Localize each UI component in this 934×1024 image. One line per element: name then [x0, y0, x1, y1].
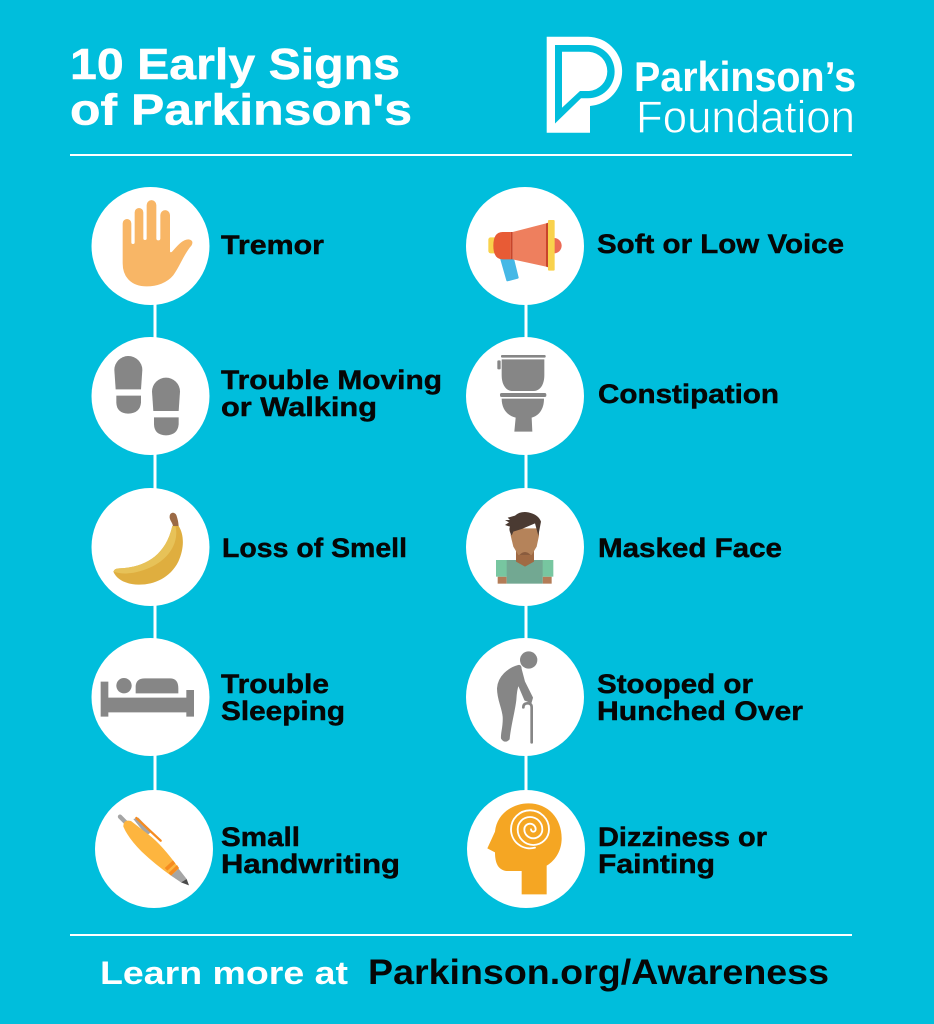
icon: megaphone — [488, 220, 562, 280]
icon: footprints — [114, 356, 180, 435]
footer call to action: Parkinson.org/Awareness — [368, 953, 829, 992]
panel: Trouble Sleeping — [92, 638, 345, 756]
label: Small Handwriting: Small — [221, 822, 300, 852]
panel: Dizziness or Fainting — [467, 790, 768, 908]
icon: stooped person with cane — [498, 651, 537, 742]
label: Stooped or Hunched Over: Hunched Over — [597, 696, 804, 726]
label: Stooped or Hunched Over — [597, 669, 804, 726]
icon: hand — [123, 201, 192, 286]
label: Soft or Low Voice: Soft or Low Voice — [597, 229, 844, 259]
panel: Tremor — [92, 187, 325, 305]
panel: Stooped or Hunched Over — [466, 638, 804, 756]
icon: toilet — [497, 355, 546, 432]
label: Trouble Moving or Walking: or Walking — [221, 392, 377, 422]
label: Dizziness or Fainting: Fainting — [598, 849, 715, 879]
logo: Parkinson's Foundation — [547, 37, 856, 143]
icon: head with spiral — [487, 803, 562, 894]
label: Tremor: Tremor — [221, 230, 325, 260]
panel: Soft or Low Voice — [466, 187, 844, 305]
label: Trouble Moving or Walking: Trouble Moving — [221, 365, 442, 395]
logo: Parkinson's Foundation: Parkinson’s — [634, 53, 856, 100]
footer call to action: Learn more at — [100, 955, 348, 991]
label: Small Handwriting: Handwriting — [221, 849, 400, 879]
logo: Parkinson's Foundation: Foundation — [636, 92, 855, 143]
title: 10 Early Signs — [70, 40, 400, 89]
icon: man's face — [496, 512, 553, 584]
panel: Trouble Moving or Walking — [92, 337, 442, 455]
footer call to action — [100, 953, 829, 992]
label: Dizziness or Fainting: Dizziness or — [598, 822, 768, 852]
title: of Parkinson's — [70, 86, 412, 134]
icon: pen — [120, 817, 189, 885]
label: Trouble Sleeping: Trouble — [221, 669, 329, 699]
title — [70, 40, 412, 134]
label: Loss of Smell: Loss of Smell — [222, 533, 407, 563]
label: Constipation: Constipation — [598, 379, 779, 409]
panel: Constipation — [466, 337, 779, 455]
label: Trouble Sleeping: Sleeping — [221, 696, 345, 726]
label: Dizziness or Fainting — [598, 822, 768, 879]
label: Masked Face: Masked Face — [598, 533, 782, 563]
label: Trouble Moving or Walking — [221, 365, 442, 422]
icon: bed — [101, 678, 194, 717]
icon: banana — [113, 513, 183, 585]
label: Small Handwriting — [221, 822, 400, 879]
label: Stooped or Hunched Over: Stooped or — [597, 669, 754, 699]
panel: Small Handwriting — [95, 790, 400, 908]
label: Trouble Sleeping — [221, 669, 345, 726]
panel: Masked Face — [466, 488, 782, 606]
panel: Loss of Smell — [92, 488, 407, 606]
